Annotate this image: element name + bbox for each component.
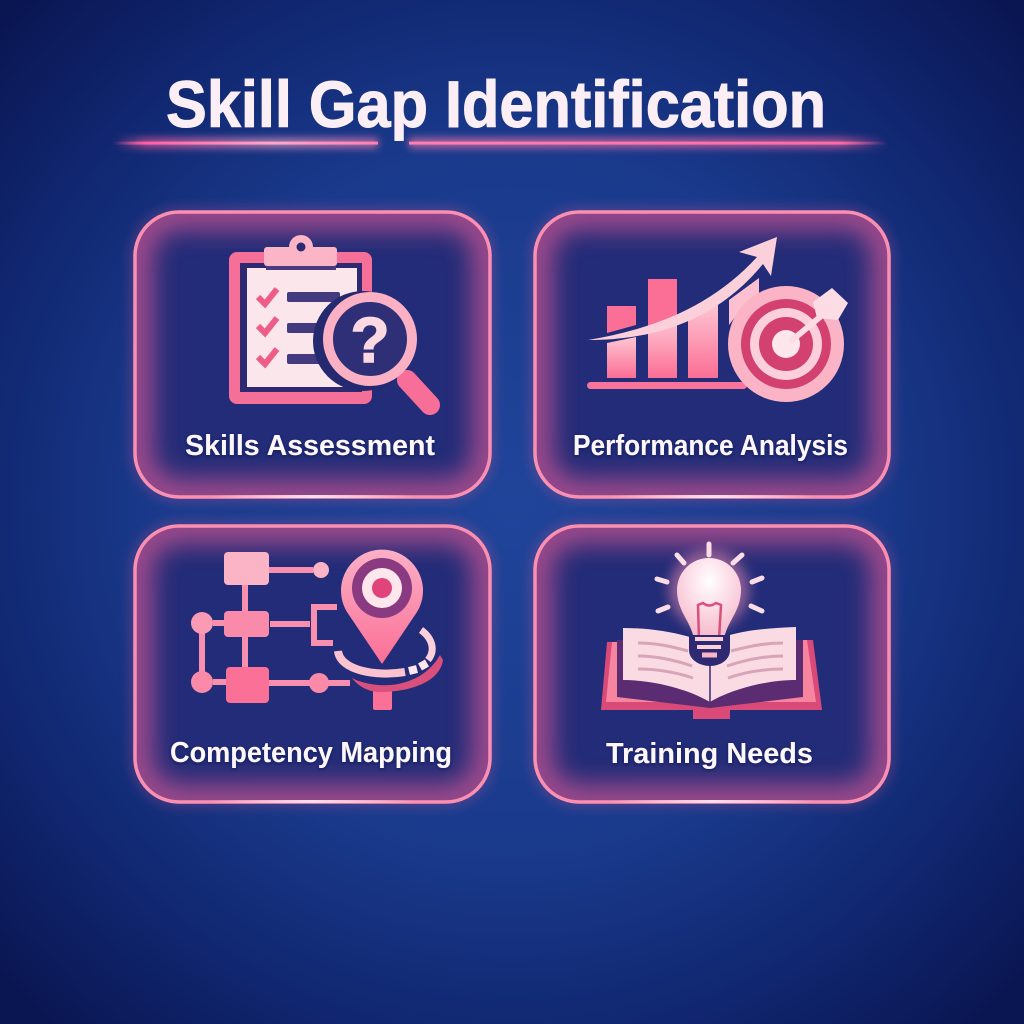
icon: bar chart with arrow and target xyxy=(587,237,848,402)
panel: competency mapping xyxy=(135,526,490,803)
title: Skill Gap Identification xyxy=(166,67,826,141)
panel: performance analysis xyxy=(535,212,889,498)
icon: open book with light bulb xyxy=(601,544,822,719)
panel: training needs xyxy=(535,526,889,803)
panel: skills assessment xyxy=(135,212,490,498)
icon: clipboard with magnifier: ? xyxy=(350,304,390,376)
icon: clipboard with magnifier xyxy=(229,235,430,405)
label: performance analysis: Performance Analysis xyxy=(573,430,848,462)
label: skills assessment: Skills Assessment xyxy=(185,430,435,462)
label: training needs: Training Needs xyxy=(606,738,813,770)
title underline xyxy=(113,138,887,148)
label: competency mapping: Competency Mapping xyxy=(170,737,452,769)
icon: flowchart with map pin xyxy=(191,550,443,710)
